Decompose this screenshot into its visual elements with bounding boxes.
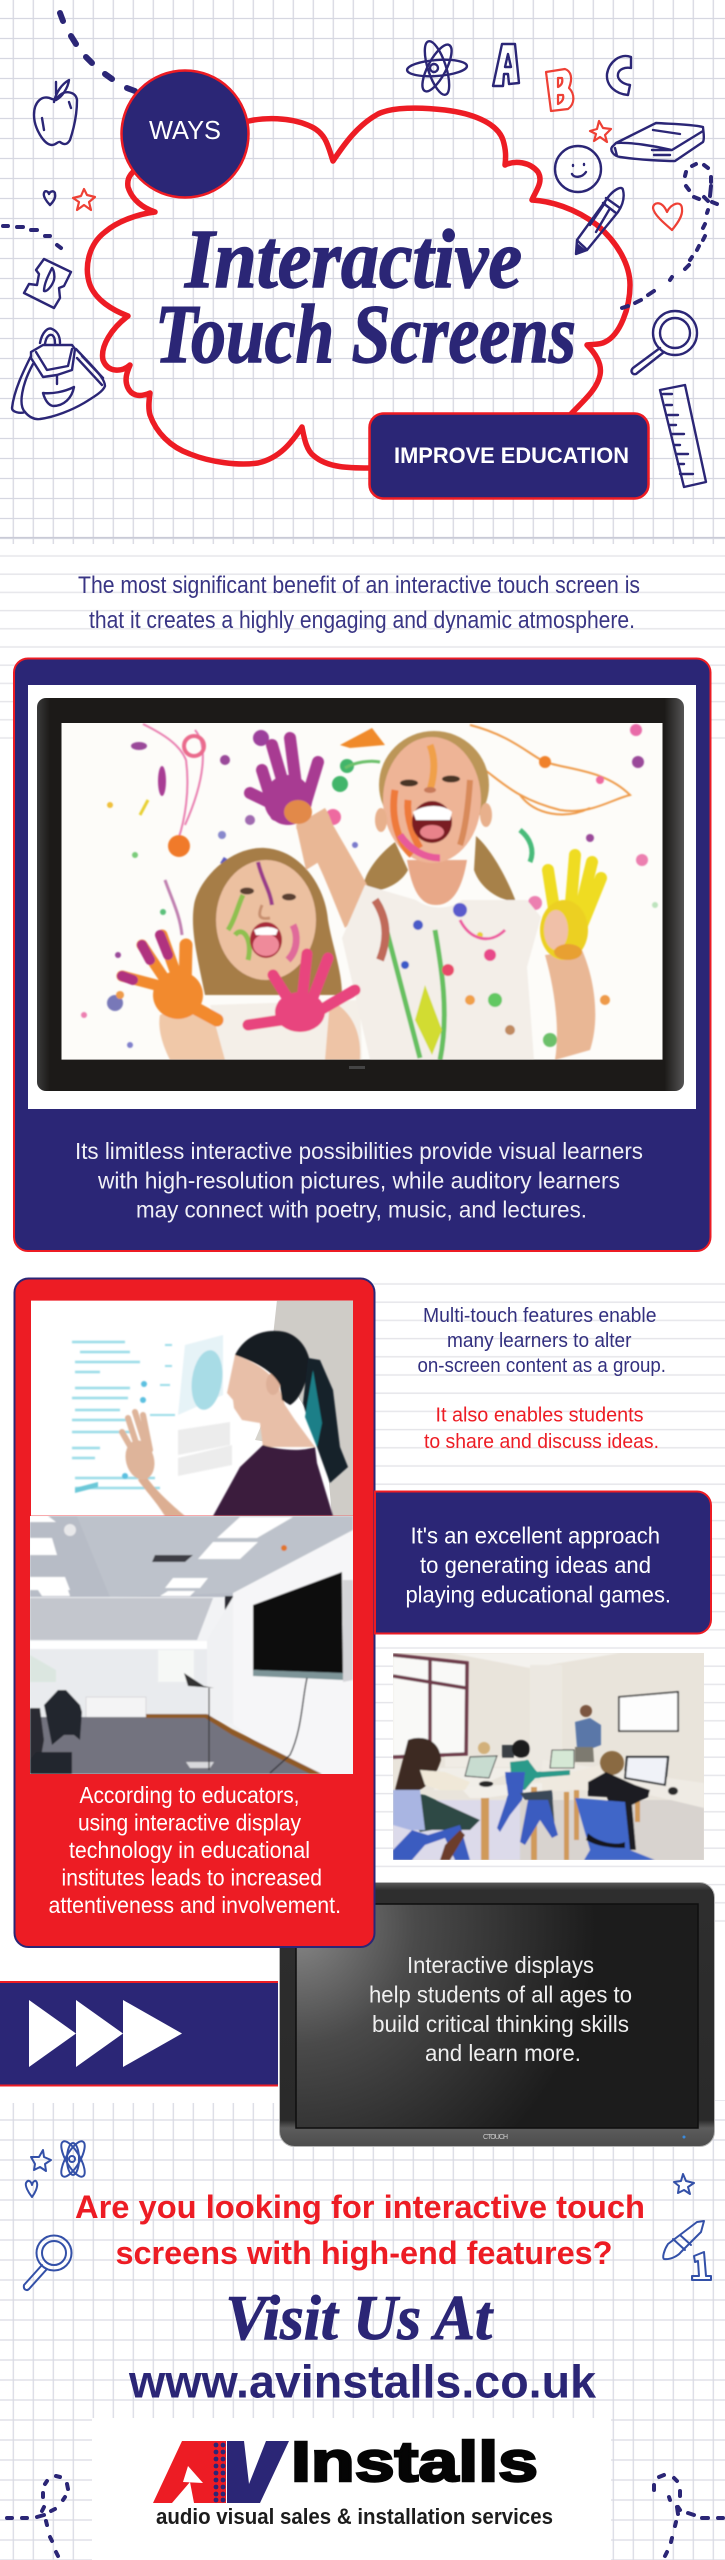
monitor text: Interactive displays <box>407 1952 594 1978</box>
tall child <box>378 730 490 816</box>
panel: red with photos <box>14 1278 374 1947</box>
small child <box>193 848 342 995</box>
monitor text: and learn more. <box>425 2040 581 2066</box>
chairs <box>44 1690 82 1745</box>
photo: woman at transparent display <box>31 1300 353 1516</box>
text block: multi-touch: Multi-touch features enable <box>423 1304 656 1327</box>
icon: ruler <box>660 385 706 487</box>
icon: atom <box>57 2138 89 2180</box>
icon: pencil <box>575 188 624 255</box>
doodles bottom right <box>663 2174 711 2280</box>
monitor frame <box>37 698 684 1091</box>
screen <box>619 1692 678 1731</box>
panel: excellent approach: to generating ideas and <box>420 1552 651 1578</box>
icon: backpack <box>12 329 105 419</box>
logo white backing <box>92 2418 611 2560</box>
panel caption: institutes leads to increased <box>62 1864 322 1890</box>
intro text <box>78 572 640 634</box>
photo: classroom <box>393 1653 704 1860</box>
text block: share ideas: to share and discuss ideas. <box>424 1430 659 1453</box>
letter B <box>546 69 573 111</box>
arm hand <box>138 1475 185 1516</box>
icon: magnifier <box>24 2236 72 2290</box>
text block: share ideas: It also enables students <box>436 1404 644 1426</box>
monitor brand: CTOUCH <box>483 2134 508 2141</box>
text block: multi-touch <box>418 1304 666 1377</box>
icon: smiley <box>555 146 601 192</box>
yellow hand <box>545 950 595 1060</box>
letter C <box>607 56 631 95</box>
teacher <box>580 1705 592 1717</box>
window <box>393 1653 467 1757</box>
logo: AV Installs: audio visual sales & installation services <box>156 2504 553 2529</box>
panel: excellent approach: playing educational games. <box>406 1582 671 1608</box>
monitor bottom logo <box>349 1066 365 1069</box>
website url: www.avinstalls.co.uk <box>128 2356 596 2408</box>
label box: improve education: IMPROVE EDUCATION <box>394 443 629 468</box>
icon: apple <box>34 80 77 145</box>
text block: multi-touch: many learners to alter <box>447 1329 632 1352</box>
panel caption <box>48 1782 341 1918</box>
dashed loop bottom right <box>654 2475 723 2556</box>
monitor text <box>369 1952 632 2066</box>
circle badge: WAYS <box>122 70 248 198</box>
tables <box>434 1768 520 1790</box>
touch monitor with text <box>280 1882 714 2146</box>
pink hand <box>248 954 355 1025</box>
photo: children covered in paint <box>62 723 662 1060</box>
orange hand <box>122 935 180 990</box>
photo: meeting room with wall display <box>30 1516 353 1774</box>
panel: excellent approach: It's an excellent approach <box>410 1522 660 1548</box>
icon: red heart <box>653 203 682 230</box>
letter A <box>493 44 519 86</box>
title: Touch Screens <box>155 288 576 381</box>
icon: star <box>31 2150 51 2171</box>
title: Interactive <box>184 213 522 306</box>
call to action <box>75 2189 645 2271</box>
text block: share ideas <box>424 1404 659 1453</box>
icon: atom <box>407 39 467 97</box>
panel: excellent approach <box>375 1492 711 1634</box>
panel caption: using interactive display <box>78 1810 301 1836</box>
boy front <box>600 1751 624 1775</box>
doodles bottom left <box>24 2138 89 2290</box>
icon: pencil <box>663 2221 704 2259</box>
laptops <box>465 1756 497 1778</box>
icon: magnifier <box>632 311 697 374</box>
header cloud outline <box>87 108 630 468</box>
monitor text: build critical thinking skills <box>372 2011 629 2037</box>
label box: improve education <box>370 414 648 498</box>
panel caption: may connect with poetry, music, and lectures. <box>136 1196 587 1222</box>
icon: book <box>611 123 704 161</box>
icon: heart <box>26 2181 37 2197</box>
panel caption: Its limitless interactive possibilities provide visual learners <box>75 1138 643 1164</box>
visit us heading: Visit Us At <box>226 2282 494 2353</box>
call to action: Are you looking for interactive touch <box>75 2189 645 2225</box>
monitor text: help students of all ages to <box>369 1982 632 2008</box>
text block: multi-touch: on-screen content as a group. <box>418 1354 666 1377</box>
panel caption: attentiveness and involvement. <box>48 1892 341 1918</box>
raised purple hand <box>295 808 332 870</box>
arrow band <box>0 1982 278 2086</box>
shirt paint <box>387 929 448 1060</box>
dashed path left <box>3 226 61 248</box>
radiator <box>86 1696 146 1717</box>
icon: triple arrow <box>29 2000 182 2067</box>
panel caption: According to educators, <box>80 1782 300 1808</box>
intro text: The most significant benefit of an interactive touch screen is <box>78 572 640 599</box>
dashed loop right <box>622 164 717 308</box>
wall display <box>253 1572 343 1676</box>
icon: number one <box>692 2252 711 2280</box>
logo: AV Installs <box>153 2430 553 2529</box>
girl <box>395 1738 441 1792</box>
boy in teal <box>512 1740 530 1758</box>
icon: star right <box>590 121 611 142</box>
panel: kids photo on display <box>14 658 710 1251</box>
floor <box>30 1717 322 1774</box>
panel caption <box>75 1138 643 1222</box>
intro text: that it creates a highly engaging and dynamic atmosphere. <box>89 607 635 634</box>
logo: AV Installs: Installs <box>291 2430 538 2494</box>
face <box>227 1355 315 1447</box>
circle badge: WAYS: WAYS <box>149 115 221 145</box>
back table and blonde child <box>445 1757 525 1767</box>
shirt <box>213 1445 333 1516</box>
icon: sharpener <box>24 259 71 308</box>
icon: small heart <box>44 191 55 205</box>
dashed path top left <box>60 13 135 91</box>
call to action: screens with high-end features? <box>116 2235 612 2271</box>
panel caption: with high-resolution pictures, while auditory learners <box>97 1168 620 1194</box>
icon: red star <box>73 189 95 210</box>
title <box>155 213 576 381</box>
floor <box>520 1798 704 1860</box>
hair <box>235 1331 310 1405</box>
dashed loop bottom left <box>7 2476 68 2556</box>
panel caption: technology in educational <box>69 1837 310 1863</box>
icon: star <box>674 2174 694 2194</box>
